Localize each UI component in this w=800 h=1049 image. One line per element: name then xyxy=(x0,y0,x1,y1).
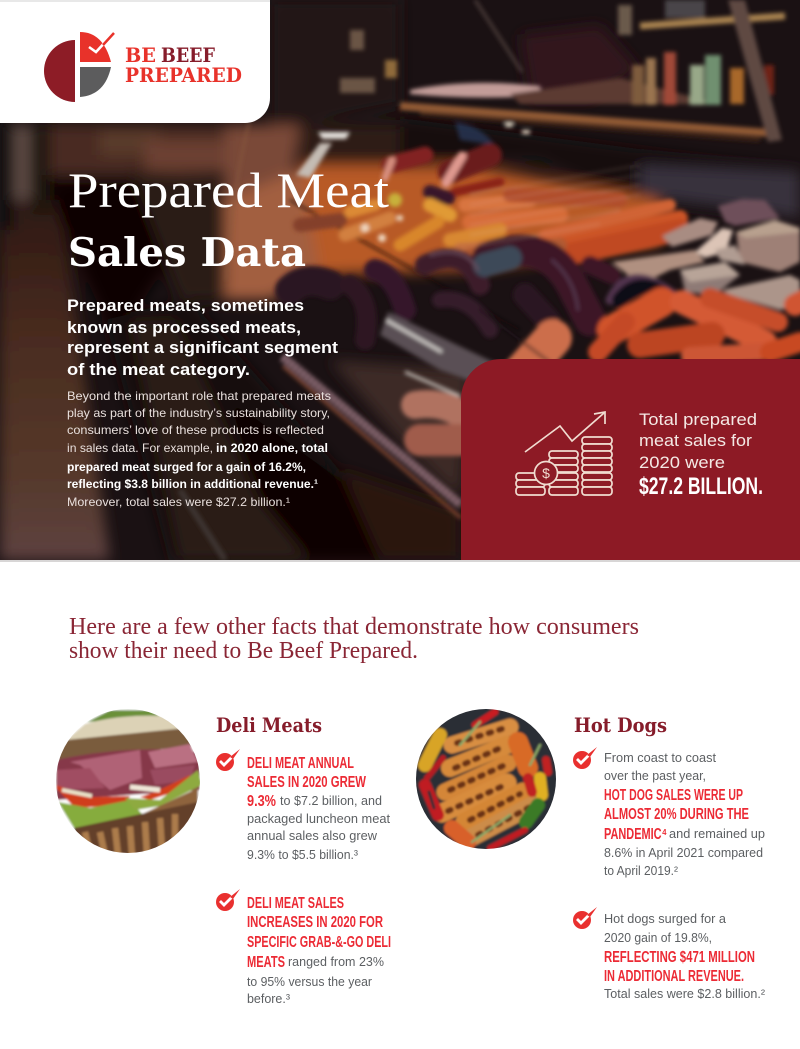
fact: pandemic hot dog sales xyxy=(604,751,765,878)
fact: annual deli sales: SALES IN 2020 GREW xyxy=(247,774,367,791)
fact: grab-and-go deli: ranged from 23% xyxy=(288,955,384,969)
intro body text: in sales data. For example, xyxy=(67,441,213,455)
fact: annual deli sales: 9.3% to $5.5 billion.³ xyxy=(247,848,358,862)
heading: Hot Dogs: Hot Dogs xyxy=(574,713,667,737)
intro body text: consumers’ love of these products is reflected xyxy=(67,423,324,437)
fact: pandemic hot dog sales: over the past year, xyxy=(604,769,706,783)
callout text: 2020 were xyxy=(639,453,725,472)
icon: check mark xyxy=(216,889,240,911)
heading: Deli Meats: Deli Meats xyxy=(216,713,322,737)
photo: grilled hot dogs xyxy=(416,709,556,849)
fact: grab-and-go deli xyxy=(247,895,391,1006)
icon: coin stacks with rising arrow xyxy=(516,412,612,495)
icon: coin stacks with rising arrow: $ xyxy=(542,465,550,481)
dark blood-sausage rings xyxy=(290,251,678,340)
fact: grab-and-go deli: MEATS xyxy=(247,954,285,971)
intro body text: in 2020 alone, total xyxy=(216,441,328,455)
title: Sales Data xyxy=(68,230,306,276)
fact: annual deli sales: 9.3% xyxy=(247,793,276,810)
fact: pandemic hot dog sales: to April 2019.² xyxy=(604,864,678,878)
logo wordmark: BEEF xyxy=(161,43,215,67)
fact: annual deli sales: DELI MEAT ANNUAL xyxy=(247,755,354,772)
upper case shelf and bottles xyxy=(640,16,785,26)
orange-yellow meats xyxy=(300,200,560,250)
photo: deli sandwich xyxy=(56,709,200,853)
fine display mesh xyxy=(470,165,640,245)
icon: check mark xyxy=(573,747,597,769)
top edge line xyxy=(0,0,270,2)
fact: additional revenue xyxy=(604,912,765,1001)
long red-orange sausages xyxy=(470,195,680,256)
callout text: meat sales for xyxy=(639,431,752,450)
fact: pandemic hot dog sales: PANDEMIC⁴ xyxy=(604,826,667,843)
logo mark xyxy=(44,32,114,102)
column: hot dogs xyxy=(573,713,765,1001)
intro body text: play as part of the industry’s sustainability story, xyxy=(67,406,330,420)
section intro heading: Here are a few other facts that demonstrate how consumers xyxy=(69,614,639,640)
fact: pandemic hot dog sales: and remained up xyxy=(669,827,765,841)
lead statement: known as processed meats, xyxy=(67,318,301,337)
column: deli meats xyxy=(216,713,391,1006)
fact: annual deli sales: packaged luncheon meat xyxy=(247,812,391,826)
fact: grab-and-go deli: SPECIFIC GRAB-&-GO DELI xyxy=(247,934,391,951)
red sausages and salami xyxy=(385,155,500,198)
bright sausages, lower right xyxy=(415,298,800,440)
hero photo: butcher's prepared meat display case xyxy=(0,0,800,560)
fact: annual deli sales xyxy=(247,755,391,862)
intro body text: Beyond the important role that prepared meats xyxy=(67,389,331,403)
section intro heading: show their need to Be Beef Prepared. xyxy=(69,638,418,664)
callout panel: total sales xyxy=(461,359,800,560)
icon: check mark xyxy=(573,907,597,929)
lead statement xyxy=(67,296,338,379)
lower panel edge xyxy=(0,560,800,562)
intro body text xyxy=(67,389,331,509)
logo panel xyxy=(0,2,270,123)
intro body text: Moreover, total sales were $27.2 billion.¹ xyxy=(67,495,290,509)
fact: annual deli sales: to $7.2 billion, and xyxy=(280,794,382,808)
lead statement: of the meat category. xyxy=(67,360,250,379)
callout text: Total prepared xyxy=(639,410,757,429)
logo wordmark xyxy=(125,43,242,87)
fact: additional revenue: 2020 gain of 19.8%, xyxy=(604,931,712,945)
fact: grab-and-go deli: INCREASES IN 2020 FOR xyxy=(247,914,383,931)
logo wordmark: BE xyxy=(125,43,156,67)
fact: pandemic hot dog sales: From coast to coast xyxy=(604,751,717,765)
icon: check mark xyxy=(216,749,240,771)
logo wordmark: PREPARED xyxy=(125,63,242,87)
lead statement: represent a significant segment xyxy=(67,338,338,357)
title: Prepared Meat xyxy=(68,162,389,218)
section intro heading xyxy=(69,614,639,664)
pale meat blocks xyxy=(718,199,780,226)
fact: additional revenue: Total sales were $2.8 billion.² xyxy=(604,987,765,1001)
fact: pandemic hot dog sales: 8.6% in April 2021 compared xyxy=(604,846,763,860)
fact: grab-and-go deli: to 95% versus the year xyxy=(247,975,372,989)
glass reflections xyxy=(378,310,493,381)
intro body text: reflecting $3.8 billion in additional revenue.¹ xyxy=(67,477,318,491)
callout text xyxy=(639,410,763,500)
lead statement: Prepared meats, sometimes xyxy=(67,296,304,315)
fact: grab-and-go deli: DELI MEAT SALES xyxy=(247,895,344,912)
fact: grab-and-go deli: before.³ xyxy=(247,992,290,1006)
title xyxy=(68,162,389,276)
intro body text: prepared meat surged for a gain of 16.2%, xyxy=(67,460,306,474)
fact: annual deli sales: annual sales also grew xyxy=(247,829,378,843)
fact: additional revenue: Hot dogs surged for a xyxy=(604,912,726,926)
